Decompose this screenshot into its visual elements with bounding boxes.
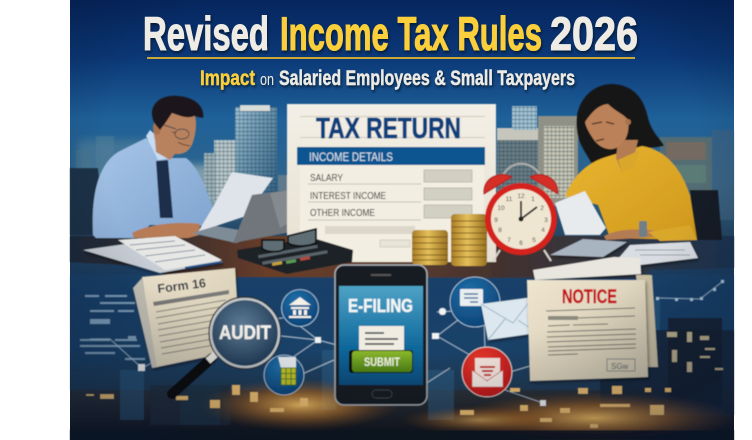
icon: spreadsheet bbox=[264, 355, 304, 395]
main title: Income Tax Rules bbox=[280, 7, 542, 60]
calculator with glasses bbox=[237, 229, 353, 274]
title rule bbox=[147, 57, 635, 59]
form rows: INTEREST INCOME bbox=[310, 190, 386, 202]
e-filing heading: E-FILING bbox=[348, 295, 413, 316]
main title: Revised bbox=[143, 7, 269, 60]
laptop bbox=[192, 188, 304, 243]
woman at desk bbox=[565, 84, 722, 241]
audit label: AUDIT bbox=[219, 323, 271, 344]
signature: SGw bbox=[611, 362, 629, 371]
income details label: INCOME DETAILS bbox=[309, 150, 393, 164]
form rows bbox=[300, 165, 484, 262]
main title bbox=[143, 7, 638, 60]
subtitle bbox=[200, 67, 575, 90]
subtitle: Impact bbox=[200, 67, 255, 90]
alarm clock: 4 bbox=[541, 227, 545, 234]
connector network bbox=[258, 310, 543, 403]
coin stacks bbox=[412, 214, 487, 266]
alarm clock: 8 bbox=[498, 227, 502, 234]
paper held by woman bbox=[555, 191, 606, 235]
form rows: OTHER INCOME bbox=[310, 207, 375, 219]
desk papers right bbox=[533, 239, 698, 280]
form rows: SALARY bbox=[310, 172, 343, 184]
alarm clock: 5 bbox=[532, 237, 536, 244]
alarm clock: 9 bbox=[494, 217, 498, 224]
alarm clock: 12 bbox=[517, 193, 525, 200]
alarm clock: 6 bbox=[519, 240, 523, 247]
form heading: TAX RETURN bbox=[316, 113, 461, 145]
subtitle: Salaried Employees & Small Taxpayers bbox=[279, 67, 575, 90]
network nodes bbox=[138, 308, 546, 406]
icon: red mail bbox=[462, 347, 512, 397]
desk papers left bbox=[83, 236, 223, 273]
notice heading: NOTICE bbox=[562, 287, 617, 308]
alarm clock: 3 bbox=[544, 217, 548, 224]
main title: 2026 bbox=[550, 7, 638, 60]
lower city at night bbox=[70, 275, 735, 440]
alarm clock: 1 bbox=[531, 196, 535, 203]
alarm clock: 11 bbox=[506, 196, 513, 203]
paper held by man bbox=[198, 172, 273, 232]
submit button: SUBMIT bbox=[364, 357, 400, 369]
alarm clock bbox=[484, 164, 558, 261]
Form 16 document bbox=[133, 268, 240, 368]
icon: envelope bbox=[481, 297, 537, 340]
alarm clock: 7 bbox=[507, 237, 511, 244]
man at desk bbox=[70, 96, 214, 238]
phone e-filing bbox=[335, 265, 427, 405]
alarm clock: 10 bbox=[497, 205, 505, 212]
skyline: upper buildings bbox=[76, 105, 734, 220]
tax return form bbox=[287, 104, 496, 262]
subtitle: on bbox=[260, 70, 274, 89]
icon: bank bbox=[282, 290, 318, 326]
notice document bbox=[527, 275, 658, 381]
income details header bar bbox=[297, 147, 485, 165]
document icon bbox=[359, 326, 404, 353]
Form 16 title: Form 16 bbox=[157, 276, 207, 296]
desk bbox=[70, 236, 734, 278]
icon: message bubble bbox=[450, 277, 500, 327]
magnifying glass with audit label bbox=[172, 297, 281, 394]
alarm clock: 2 bbox=[540, 205, 544, 212]
